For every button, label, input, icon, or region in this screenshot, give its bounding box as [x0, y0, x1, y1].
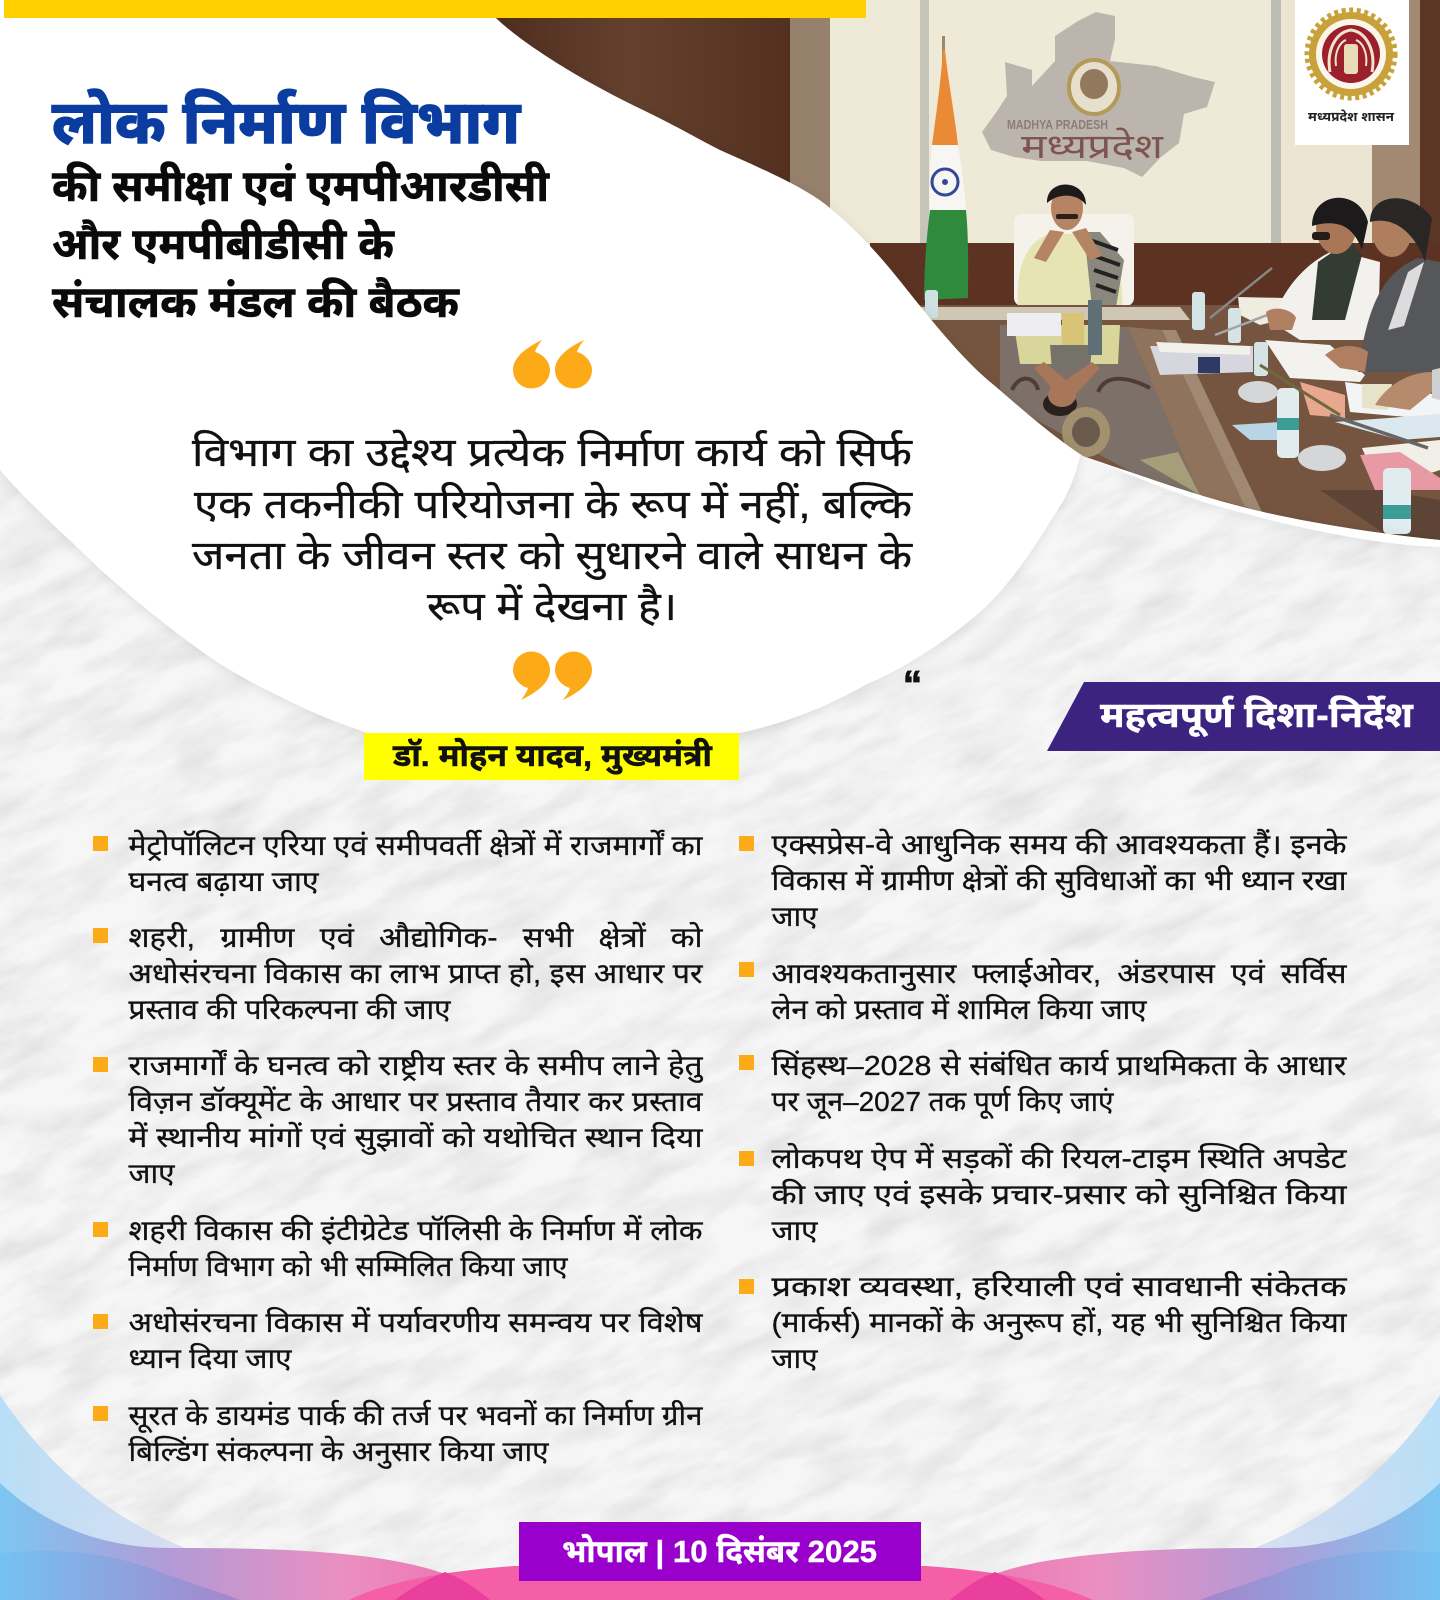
item 8 [739, 957, 1348, 1025]
item 9 [739, 1049, 1347, 1119]
item 2: प्रस्ताव की परिकल्पना की जाए [128, 993, 451, 1025]
section banner: महत्वपूर्ण दिशा-निर्देश [1100, 695, 1415, 737]
item 2: अधोसंरचना विकास का लाभ प्राप्त हो, इस आधार पर [128, 957, 703, 989]
item 3: जाए [128, 1158, 175, 1189]
item 4: शहरी विकास की इंटीग्रेटेड पॉलिसी के निर्माण में लोक [128, 1214, 703, 1246]
item 11: प्रकाश व्यवस्था, हरियाली एवं सावधानी संकेतक [772, 1270, 1347, 1302]
left column guidelines [93, 829, 704, 1469]
item 6: बिल्डिंग संकल्पना के अनुसार किया जाए [128, 1435, 549, 1469]
item 1: मेट्रोपॉलिटन एरिया एवं समीपवर्ती क्षेत्रों में राजमार्गों का [128, 829, 703, 862]
item 3: विज़न डॉक्यूमेंट के आधार पर प्रस्ताव तैयार कर प्रस्ताव [128, 1085, 703, 1119]
item 6: सूरत के डायमंड पार्क की तर्ज पर भवनों का निर्माण ग्रीन [128, 1399, 703, 1433]
quote text: रूप में देखना है। [427, 584, 677, 629]
item 10: जाए [772, 1215, 818, 1246]
item 9: पर जून–2027 तक पूर्ण किए जाएं [772, 1085, 1114, 1119]
closing quote mark [513, 652, 592, 700]
right column guidelines [739, 828, 1348, 1374]
item 3 [93, 1049, 704, 1189]
date badge: भोपाल | 10 दिसंबर 2025 [562, 1534, 877, 1569]
item 11: (मार्कर्स) मानकों के अनुरूप हों, यह भी सुनिश्चित किया [772, 1306, 1347, 1340]
quote text: विभाग का उद्देश्य प्रत्येक निर्माण कार्य को सिर्फ [192, 430, 913, 475]
section banner [1047, 682, 1440, 751]
main title [52, 89, 550, 327]
item 4 [93, 1214, 703, 1282]
white curved quote panel [0, 0, 1440, 746]
attribution tag [364, 733, 739, 780]
main title: लोक निर्माण विभाग [52, 89, 521, 156]
quote text: एक तकनीकी परियोजना के रूप में नहीं, बल्कि [194, 482, 913, 527]
chief minister [1014, 184, 1134, 307]
item 8: लेन को प्रस्ताव में शामिल किया जाए [772, 993, 1147, 1025]
item 5: ध्यान दिया जाए [128, 1342, 292, 1374]
item 4: निर्माण विभाग को भी सम्मिलित किया जाए [128, 1250, 568, 1282]
meeting photograph [470, 0, 1440, 545]
item 7: विकास में ग्रामीण क्षेत्रों की सुविधाओं का भी ध्यान रखा [772, 864, 1347, 898]
government logo badge [1295, 0, 1409, 145]
map on the wall: मध्यप्रदेश [1021, 127, 1164, 166]
main title: की समीक्षा एवं एमपीआरडीसी [52, 161, 550, 211]
item 1: घनत्व बढ़ाया जाए [128, 866, 319, 897]
main title: और एमपीबीडीसी के [52, 218, 395, 269]
item 5: अधोसंरचना विकास में पर्यावरणीय समन्वय पर विशेष [128, 1306, 703, 1338]
top yellow bar [4, 0, 866, 18]
bottom decorative waves [0, 1395, 1440, 1600]
map on the wall: MADHYA PRADESH [1007, 118, 1108, 132]
item 7: एक्सप्रेस-वे आधुनिक समय की आवश्यकता हैं। इनके [772, 828, 1347, 862]
map on the wall [982, 12, 1215, 177]
item 10: की जाए एवं इसके प्रचार-प्रसार को सुनिश्चित किया [772, 1178, 1347, 1212]
stray quotation glyph: “ [903, 664, 922, 706]
item 11 [739, 1270, 1347, 1374]
main title: संचालक मंडल की बैठक [52, 276, 460, 327]
item 7 [739, 828, 1347, 932]
item 8: आवश्यकतानुसार फ्लाईओवर, अंडरपास एवं सर्विस [772, 957, 1348, 991]
government logo badge: मध्यप्रदेश शासन [1308, 109, 1395, 124]
opening quote mark [513, 340, 592, 388]
item 6 [93, 1399, 703, 1469]
conference table [890, 268, 1440, 545]
quote text [192, 430, 913, 629]
item 1 [93, 829, 703, 897]
item 2: शहरी, ग्रामीण एवं औद्योगिक- सभी क्षेत्रों को [128, 921, 703, 953]
item 2 [93, 921, 703, 1025]
item 3: राजमार्गों के घनत्व को राष्ट्रीय स्तर के समीप लाने हेतु [128, 1049, 704, 1083]
item 3: में स्थानीय मांगों एवं सुझावों को यथोचित स्थान दिया [128, 1121, 703, 1155]
item 10: लोकपथ ऐप में सड़कों की रियल-टाइम स्थिति अपडेट [772, 1142, 1347, 1174]
indian flag [924, 36, 968, 300]
date badge [519, 1522, 921, 1581]
item 5 [93, 1306, 703, 1374]
item 7: जाए [772, 901, 818, 932]
officials seated on right [1266, 198, 1440, 410]
item 10 [739, 1142, 1347, 1246]
item 9: सिंहस्थ–2028 से संबंधित कार्य प्राथमिकता के आधार [772, 1049, 1347, 1081]
attribution tag: डॉ. मोहन यादव, मुख्यमंत्री [392, 738, 713, 775]
reflections in the glass [1012, 325, 1200, 495]
item 11: जाए [772, 1343, 818, 1374]
quote text: जनता के जीवन स्तर को सुधारने वाले साधन के [192, 533, 913, 579]
